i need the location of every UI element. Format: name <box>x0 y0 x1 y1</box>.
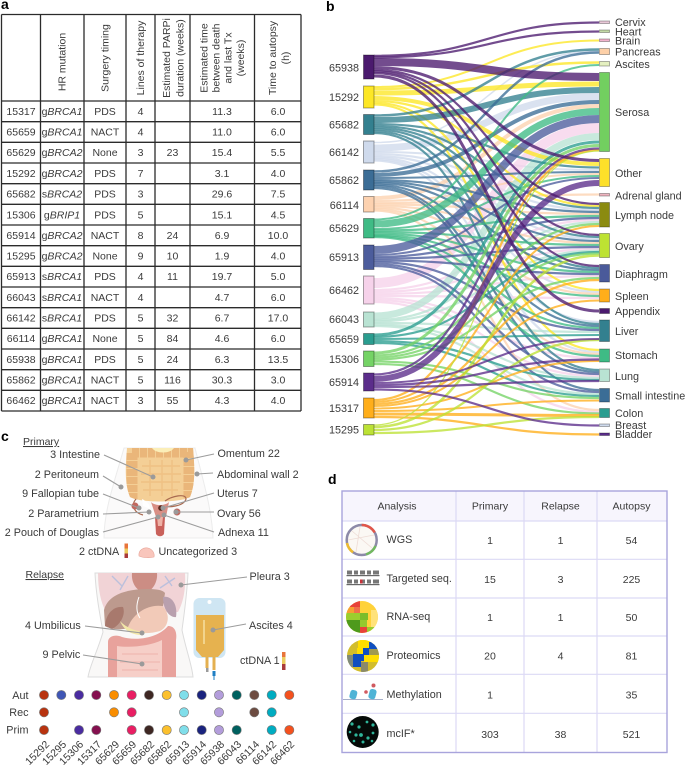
table rows: 4.7 <box>215 292 229 304</box>
table rows: 5 <box>138 333 144 345</box>
table d values: Targeted seq. <box>386 573 452 585</box>
primary site labels: 2 Parametrium <box>28 508 99 520</box>
table rows: None <box>92 147 118 159</box>
sankey right labels: Colon <box>615 408 643 420</box>
table rows: 4.6 <box>215 333 229 345</box>
table rows: 15306 <box>6 210 36 222</box>
icon: proteomics heatmap <box>347 640 379 672</box>
dot matrix column labels: 65659 <box>110 739 139 768</box>
table rows: 4.0 <box>271 168 285 180</box>
table d header: Primary <box>472 500 509 512</box>
table rows: 65629 <box>6 147 36 159</box>
primary site labels: 2 Peritoneum <box>35 469 99 481</box>
table rows: 3.0 <box>271 374 285 386</box>
dot matrix column labels: 15317 <box>75 739 104 768</box>
table rows: 4.0 <box>271 250 285 262</box>
sankey right labels: Spleen <box>615 291 649 303</box>
table d values: 1 <box>558 612 564 624</box>
relapse site labels: Pleura 3 <box>250 571 290 583</box>
sankey right labels: Serosa <box>615 107 649 119</box>
table d values: 1 <box>558 535 564 547</box>
icon: RNA-seq heatmap <box>346 601 378 633</box>
table rows: gBRCA1 <box>42 333 82 345</box>
panel label d: d <box>328 471 337 487</box>
table rows <box>6 106 288 407</box>
table rows: 66462 <box>6 395 36 407</box>
sankey right labels: Breast <box>615 420 646 432</box>
table rows: PDS <box>94 210 116 222</box>
sankey right labels: Ovary <box>615 241 644 253</box>
table rows: 4 <box>138 106 144 118</box>
primary site labels: 9 Fallopian tube <box>22 488 99 500</box>
table rows: 4 <box>138 292 144 304</box>
relapse site labels: Ascites 4 <box>249 620 293 632</box>
dot matrix row labels: Aut <box>12 690 28 702</box>
table rows: 10.0 <box>268 230 288 242</box>
table rows: sBRCA1 <box>42 271 82 283</box>
table rows: 19.7 <box>212 271 232 283</box>
table rows: 7 <box>138 168 144 180</box>
table rows: sBRCA2 <box>42 188 82 200</box>
table rows: 5 <box>138 374 144 386</box>
table rows: 65938 <box>6 354 36 366</box>
table rows: sBRCA1 <box>42 312 82 324</box>
table rows: 10 <box>167 250 178 262</box>
icon: targeted sequencing <box>346 570 380 585</box>
sankey right labels: Small intestine <box>615 390 685 402</box>
sankey left labels: 15317 <box>329 403 359 415</box>
table rows: 5.0 <box>271 271 285 283</box>
primary site labels: Adnexa 11 <box>218 527 269 539</box>
table header: Surgery timing <box>100 24 112 92</box>
sankey left labels: 15292 <box>329 92 359 104</box>
table rows: 66142 <box>6 312 36 324</box>
table d values: 15 <box>484 574 496 586</box>
dot matrix column labels: 65629 <box>93 739 122 768</box>
sankey left labels: 65862 <box>329 175 359 187</box>
table d header: Analysis <box>377 500 417 512</box>
sankey right labels: Ascites <box>615 59 650 71</box>
sankey right labels: Lymph node <box>615 210 674 222</box>
table rows: gBRCA2 <box>42 230 83 242</box>
dot matrix column labels: 15292 <box>23 739 52 768</box>
dot matrix column labels: 66462 <box>268 739 297 768</box>
table rows: 9 <box>138 250 144 262</box>
table d values: mcIF* <box>386 728 415 740</box>
table rows: 1.9 <box>215 250 229 262</box>
relapse site labels: ctDNA 1 <box>240 655 280 667</box>
table d values: 20 <box>484 650 496 662</box>
table rows: PDS <box>94 168 116 180</box>
table rows: 6.9 <box>215 230 229 242</box>
table rows: 24 <box>167 230 178 242</box>
table rows: sBRCA1 <box>42 292 82 304</box>
sankey left labels: 65914 <box>329 377 359 389</box>
illustration: relapse torso <box>88 573 193 677</box>
table rows: NACT <box>91 230 120 242</box>
sankey right labels: Liver <box>615 326 639 338</box>
table rows: 65914 <box>6 230 36 242</box>
sankey right labels: Heart <box>615 26 641 38</box>
dot matrix column labels: 65914 <box>180 739 209 768</box>
dot matrix column labels: 15295 <box>40 739 69 768</box>
panel a: patient table <box>2 14 301 411</box>
illustration: ascites bag <box>194 598 226 680</box>
table rows: 17.0 <box>268 312 288 324</box>
table rows: PDS <box>94 312 116 324</box>
table header <box>56 18 292 98</box>
ctDNA and uncategorized legend: 2 ctDNA <box>79 546 120 558</box>
sankey right labels: Adrenal gland <box>615 190 682 202</box>
table rows: NACT <box>91 395 120 407</box>
icon: mcIF microscopy <box>347 716 379 748</box>
dots <box>39 690 294 735</box>
sankey right nodes <box>600 21 610 436</box>
table rows: 6.0 <box>271 292 285 304</box>
table d values: 303 <box>481 729 499 741</box>
sankey right labels: Stomach <box>615 350 658 362</box>
primary site labels <box>5 448 299 539</box>
panel c: primary heading: Primary <box>23 436 60 448</box>
table rows: 7.5 <box>271 188 285 200</box>
table rows: PDS <box>94 188 116 200</box>
sankey right labels: Diaphragm <box>615 269 668 281</box>
sample dot matrix <box>6 690 297 768</box>
relapse site labels: 9 Pelvic <box>42 649 81 661</box>
table rows: 13.5 <box>268 354 288 366</box>
table rows: 4.0 <box>271 395 285 407</box>
table rows: 6.0 <box>271 106 285 118</box>
table rows: 3 <box>138 395 144 407</box>
table rows: 29.6 <box>212 188 232 200</box>
table header: Estimated PARPi <box>161 18 173 98</box>
table rows: 30.3 <box>212 374 232 386</box>
table rows: 4 <box>138 271 144 283</box>
table rows: gBRCA1 <box>42 126 82 138</box>
table d header: Autopsy <box>613 500 651 512</box>
table rows: 11.3 <box>212 106 232 118</box>
table rows: NACT <box>91 292 120 304</box>
table rows: gBRCA1 <box>42 106 82 118</box>
illustration: primary abdomen <box>104 448 213 538</box>
ctDNA and uncategorized legend: Uncategorized 3 <box>158 546 237 558</box>
dot matrix column labels: 65862 <box>145 739 174 768</box>
dot matrix column labels: 65682 <box>128 739 157 768</box>
table rows: PDS <box>94 354 116 366</box>
relapse site labels: 4 Umbilicus <box>25 620 81 632</box>
relapse leader lines <box>83 577 247 666</box>
table d values: 225 <box>623 574 640 586</box>
table rows: PDS <box>94 271 116 283</box>
sankey right labels: Appendix <box>615 306 661 318</box>
table rows: 3 <box>138 147 144 159</box>
ctDNA and uncategorized legend <box>79 544 237 558</box>
sankey right labels <box>615 17 685 441</box>
table header: (weeks) <box>235 40 247 76</box>
relapse ctDNA tube <box>282 652 286 670</box>
table rows: 3 <box>138 188 144 200</box>
table rows: 15.1 <box>212 210 232 222</box>
table header: (h) <box>280 52 292 64</box>
table d header <box>377 500 651 512</box>
primary leader lines <box>103 454 214 532</box>
icon: methylation <box>343 684 383 700</box>
dot matrix column labels: 66142 <box>250 739 279 768</box>
table rows: 6.7 <box>215 312 229 324</box>
sankey left labels: 65682 <box>329 120 359 132</box>
table header: Time to autopsy <box>267 20 279 95</box>
table d header: Relapse <box>541 500 580 512</box>
table d values <box>386 534 640 741</box>
sankey left labels: 15306 <box>329 354 359 366</box>
table rows: 5.5 <box>271 147 285 159</box>
dot matrix row labels: Rec <box>9 707 29 719</box>
sankey right labels: Other <box>615 168 642 180</box>
table rows: 55 <box>167 395 178 407</box>
sankey left labels: 65659 <box>329 334 359 346</box>
sankey left labels: 66114 <box>330 200 359 212</box>
primary site labels: Ovary 56 <box>217 508 261 520</box>
table rows: 4.5 <box>271 210 285 222</box>
sankey left labels: 65938 <box>329 62 359 74</box>
table rows: 15292 <box>6 168 36 180</box>
table rows: 5 <box>138 210 144 222</box>
dot matrix column labels: 65938 <box>198 739 227 768</box>
table header: Estimated time <box>198 23 210 93</box>
table rows: gBRCA2 <box>42 147 83 159</box>
panel label c: c <box>1 428 9 444</box>
sankey left labels: 65913 <box>329 252 359 264</box>
table d values: 54 <box>626 535 637 547</box>
panel d: analysis table <box>342 491 667 752</box>
table rows: 116 <box>164 374 181 386</box>
table d values: 1 <box>487 612 493 624</box>
table d values: 521 <box>623 729 640 741</box>
sankey right labels: Lung <box>615 371 639 383</box>
table rows: 5 <box>138 312 144 324</box>
panel c: relapse heading: Relapse <box>26 569 64 581</box>
dot matrix column labels: 66043 <box>215 739 244 768</box>
table rows: 23 <box>167 147 178 159</box>
relapse site labels <box>25 571 293 667</box>
sankey left nodes <box>364 55 374 435</box>
table d values: Proteomics <box>386 650 441 662</box>
sankey right labels: Bladder <box>615 429 653 441</box>
table rows: 6.3 <box>215 354 229 366</box>
table rows: gBRCA1 <box>42 374 82 386</box>
table rows: 4 <box>138 126 144 138</box>
table rows: NACT <box>91 374 120 386</box>
table rows: gBRIP1 <box>44 210 80 222</box>
table rows: 6.0 <box>271 333 285 345</box>
table rows: 65862 <box>6 374 36 386</box>
dot matrix column labels: 66114 <box>234 739 262 767</box>
table d values: 3 <box>558 574 564 586</box>
table d values: 35 <box>626 690 637 702</box>
table rows: PDS <box>94 106 116 118</box>
dot matrix column labels <box>23 739 297 768</box>
table header: duration (weeks) <box>174 19 186 97</box>
table rows: 15295 <box>6 250 36 262</box>
sankey left labels: 66462 <box>329 285 359 297</box>
table d values: 1 <box>487 535 493 547</box>
table d values: Methylation <box>386 689 442 701</box>
table d values: RNA-seq <box>386 611 430 623</box>
dot matrix row labels: Prim <box>6 724 28 736</box>
table rows: 15.4 <box>212 147 232 159</box>
table rows: None <box>92 250 118 262</box>
sankey left labels <box>329 62 359 436</box>
table rows: NACT <box>91 126 120 138</box>
primary site labels: Abdominal wall 2 <box>217 469 299 481</box>
table rows: 8 <box>138 230 144 242</box>
sankey left labels: 66043 <box>329 314 359 326</box>
primary site labels: 2 Pouch of Douglas <box>5 527 100 539</box>
table header: and last Tx <box>222 32 234 84</box>
table rows: gBRCA1 <box>42 354 82 366</box>
table rows: 66114 <box>7 333 35 345</box>
table rows: 65659 <box>6 126 36 138</box>
table d values: 38 <box>555 729 566 741</box>
table rows: 11.0 <box>212 126 232 138</box>
table rows: 65682 <box>6 188 36 200</box>
primary site labels: Uterus 7 <box>217 488 258 500</box>
table rows: 65913 <box>6 271 36 283</box>
sankey left labels: 15295 <box>329 424 359 436</box>
panel b: sankey diagram <box>329 17 685 441</box>
primary site labels: 3 Intestine <box>50 449 100 461</box>
dot matrix row labels <box>6 690 29 736</box>
table header: between death <box>210 23 222 92</box>
table rows: 11 <box>167 271 178 283</box>
sankey right labels: Pancreas <box>615 46 661 58</box>
table d values: 50 <box>626 612 637 624</box>
primary site labels: Omentum 22 <box>218 448 280 460</box>
table header: Lines of therapy <box>135 20 147 95</box>
dot matrix column labels: 65913 <box>163 739 192 768</box>
table d values: 1 <box>487 690 493 702</box>
table d values: 4 <box>558 650 564 662</box>
table d values: 81 <box>626 650 637 662</box>
table rows: 24 <box>167 354 178 366</box>
sankey left labels: 65629 <box>329 223 359 235</box>
sankey right labels: Cervix <box>615 17 646 29</box>
sankey right labels: Brain <box>615 36 640 48</box>
table rows: 84 <box>167 333 178 345</box>
table rows: gBRCA1 <box>42 395 82 407</box>
table rows: 5 <box>138 354 144 366</box>
table d values: WGS <box>386 534 412 546</box>
table rows: None <box>92 333 118 345</box>
table rows: 15317 <box>6 106 36 118</box>
sankey left labels: 66142 <box>329 147 359 159</box>
table rows: 66043 <box>6 292 36 304</box>
sankey ribbons <box>374 22 599 434</box>
table rows: gBRCA2 <box>42 168 83 180</box>
table header: HR mutation <box>56 33 68 91</box>
table rows: 32 <box>167 312 178 324</box>
table rows: 3.1 <box>215 168 229 180</box>
table rows: 4.3 <box>215 395 229 407</box>
table rows: gBRCA2 <box>42 250 83 262</box>
table rows: 6.0 <box>271 126 285 138</box>
dot matrix column labels: 15306 <box>57 739 86 768</box>
icon: WGS circos <box>347 525 377 555</box>
